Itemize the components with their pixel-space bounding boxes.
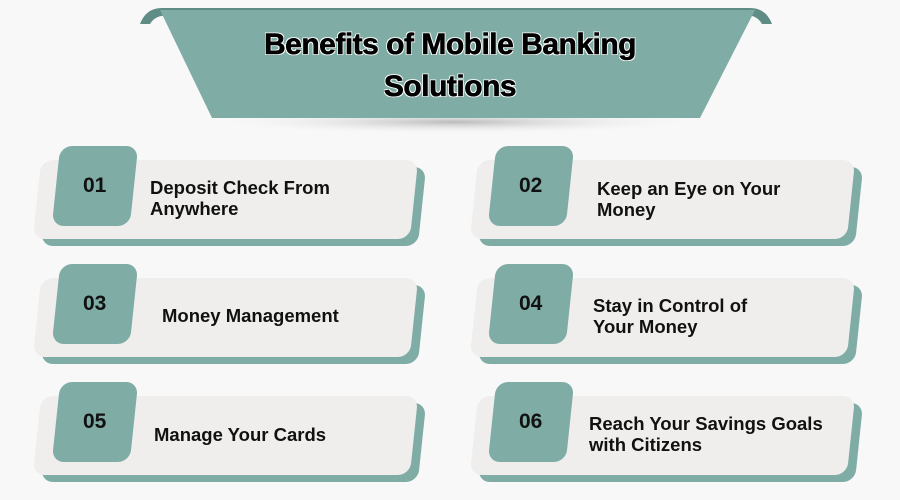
title: Solutions: [384, 70, 516, 103]
title: Benefits of Mobile Banking: [264, 28, 636, 61]
card 02: [471, 146, 862, 246]
text: 02: [519, 174, 543, 197]
text: Money: [597, 199, 656, 220]
text: Manage Your Cards: [154, 424, 326, 445]
text: 06: [519, 410, 543, 433]
text: Reach Your Savings Goals: [589, 413, 823, 434]
text: 04: [519, 292, 543, 315]
card 06: [471, 382, 862, 482]
banner: [140, 8, 772, 130]
text: 01: [83, 174, 107, 197]
text: Money Management: [162, 305, 339, 326]
text: with Citizens: [589, 434, 702, 455]
text: Anywhere: [150, 198, 238, 219]
title: [264, 28, 636, 103]
card 04: [471, 264, 862, 364]
text: Keep an Eye on Your: [597, 178, 780, 199]
card 01: [34, 146, 425, 246]
text: Stay in Control of: [593, 295, 747, 316]
card 03: [34, 264, 425, 364]
text: Deposit Check From: [150, 177, 330, 198]
text: Your Money: [593, 316, 698, 337]
text: 03: [83, 292, 107, 315]
text: 05: [83, 410, 107, 433]
card 05: [34, 382, 425, 482]
